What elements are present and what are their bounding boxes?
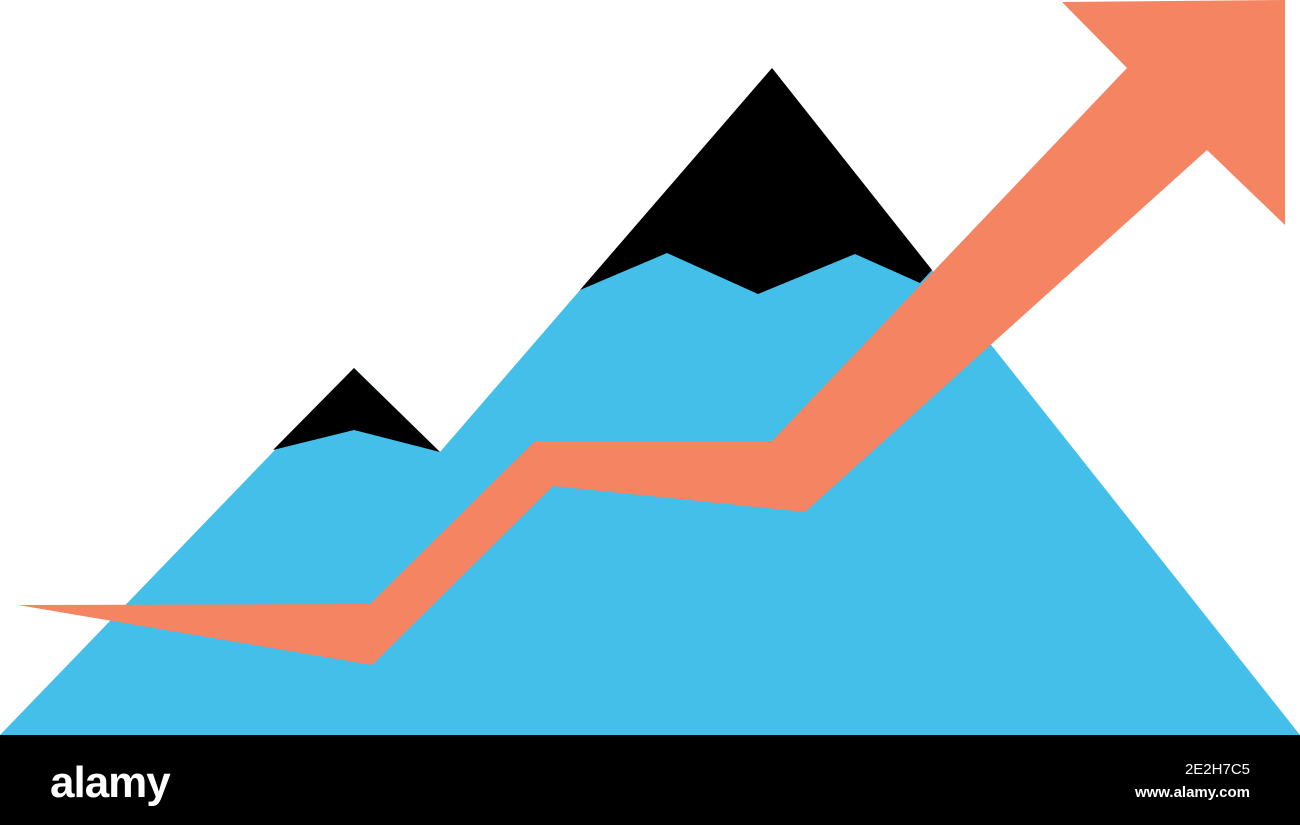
footer bar <box>0 735 1300 825</box>
snow cap: small peak <box>273 368 440 452</box>
footer url: www.alamy.com <box>1134 784 1250 801</box>
arrow: rising trend <box>18 0 1285 665</box>
snow cap: large peak <box>580 68 932 294</box>
footer logo text: alamy <box>50 758 171 807</box>
footer image id: 2E2H7C5 <box>1185 761 1250 778</box>
